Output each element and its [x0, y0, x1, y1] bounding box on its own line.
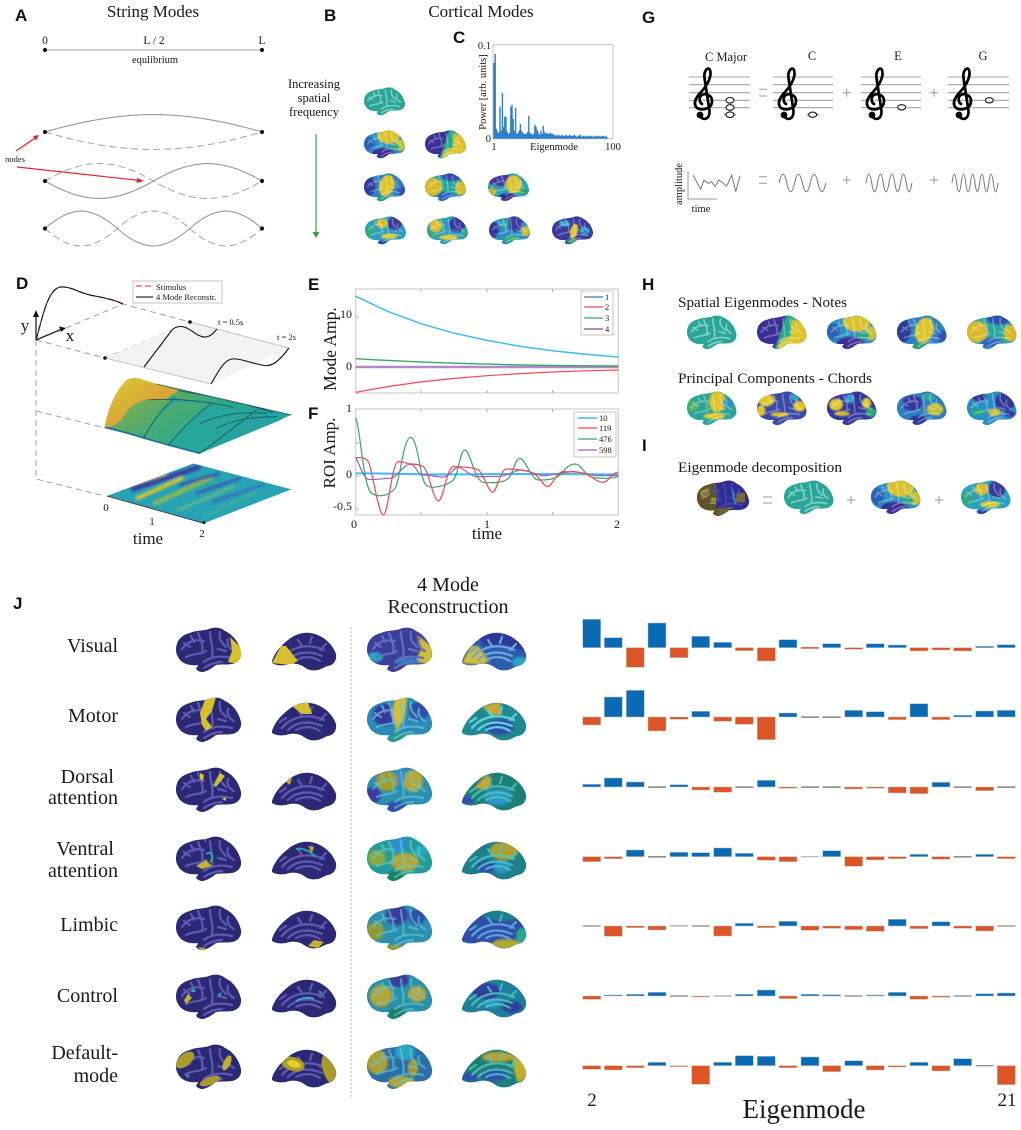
bar chart: default mode [583, 1056, 1015, 1085]
equilibrium string [42, 35, 266, 66]
equals sign [763, 497, 772, 503]
heading: 4 Mode Reconstruction [387, 574, 509, 618]
3D surface [105, 378, 292, 453]
spectrum labels: 1 [491, 142, 497, 153]
mode 2 curves [43, 164, 264, 198]
row: control brains [176, 973, 528, 1020]
3D axes: x [66, 326, 75, 345]
spectrum labels: Eigenmode [530, 142, 578, 153]
bar chart: ventral attention [583, 848, 1015, 866]
composite waveform [693, 175, 740, 192]
spectrum axes [493, 45, 613, 139]
axis labels: time [472, 524, 502, 543]
mode brain 1 [784, 480, 834, 515]
legend: 10 [599, 413, 608, 423]
decomposition brain [697, 480, 750, 517]
equilibrium string: 0 [42, 35, 48, 47]
legend: 476 [599, 434, 612, 444]
note labels: G [978, 49, 988, 63]
note labels [705, 49, 988, 64]
eigenmode axis labels [587, 1090, 1016, 1124]
legend: 119 [599, 423, 611, 433]
mode brain 2 [870, 477, 921, 515]
heading: 4 Mode Reconstruction: Reconstruction [387, 596, 509, 618]
time axis labels: 0 [103, 502, 109, 514]
mode 3 curves [43, 211, 264, 246]
legend: 2 [605, 302, 609, 312]
heading: Cortical Modes: Cortical Modes [428, 2, 534, 21]
axes box [356, 409, 618, 515]
panel letter I: I [642, 436, 647, 455]
row: motor brains [176, 697, 528, 743]
legend: Stimulus [156, 282, 186, 292]
increasing spatial frequency label [288, 77, 341, 119]
increasing spatial frequency label: frequency [289, 105, 340, 119]
equilibrium string: L / 2 [143, 35, 165, 47]
3D axes [21, 310, 75, 345]
panel E: mode amplitude chart [308, 275, 618, 393]
notes [724, 98, 993, 117]
panel B: cortical modes [288, 2, 594, 246]
panel letter E: E [308, 275, 319, 294]
equilibrium string: L [258, 35, 266, 47]
heading: Eigenmode decomposition: Eigenmode decomposition [678, 460, 843, 476]
spectrum labels [478, 41, 621, 153]
axis labels: 1 [346, 401, 352, 415]
legend [581, 291, 613, 335]
sine waves [779, 174, 998, 192]
heading: Spatial Eigenmodes - Notes: Spatial Eigenmodes - Notes [678, 295, 847, 311]
network labels: attention [48, 787, 118, 809]
network labels: Ventral [56, 838, 114, 860]
legend: 3 [605, 313, 609, 323]
panel letter D: D [16, 274, 28, 293]
panel letter F: F [308, 404, 318, 423]
mode brain 3 [961, 480, 1011, 516]
arrow: green downward [312, 134, 320, 238]
spectrum labels: Power [arb. units] [478, 54, 489, 130]
time axis labels [103, 502, 205, 548]
bar chart: limbic [583, 919, 1015, 936]
panel C: power spectrum [453, 28, 621, 153]
y axis labels: 0 [346, 359, 352, 373]
bar chart: dorsal attention [583, 778, 1015, 794]
equals and plus signs for waves [759, 176, 938, 184]
increasing spatial frequency label: Increasing [288, 77, 341, 91]
ROI curves [356, 418, 618, 515]
bar chart: visual [583, 619, 1015, 667]
mode 1 curves [43, 115, 264, 149]
axis labels: ROI Amp. [320, 418, 339, 488]
mode curves [356, 296, 618, 392]
plus sign [847, 496, 855, 504]
heading: String Modes: String Modes [107, 2, 199, 21]
increasing spatial frequency label: spatial [298, 91, 331, 105]
network labels: Motor [68, 705, 118, 727]
heading: 4 Mode Reconstruction: 4 Mode [417, 574, 479, 596]
axis labels: 2 [614, 517, 620, 531]
row: visual brains [176, 627, 528, 673]
spectrum bars [494, 54, 607, 139]
bar chart: control [583, 990, 1015, 999]
axis labels: 0 [346, 467, 352, 481]
time series axes: time [692, 204, 711, 215]
network labels: Control [57, 985, 118, 1007]
row: dorsal attention brains [176, 767, 528, 813]
panel letter B: B [324, 6, 336, 25]
note labels: E [894, 49, 902, 63]
row: ventral attention brains [176, 836, 528, 882]
panel letter H: H [642, 275, 654, 294]
musical staves [689, 77, 1009, 108]
brain row: chords [687, 391, 1017, 426]
legend [133, 281, 222, 303]
panel letter C: C [453, 28, 465, 47]
time series axes: amplitude [674, 163, 685, 205]
panel J: resting state networks [13, 574, 1016, 1124]
panel D: stimulus surface [16, 274, 296, 548]
eigenmode axis labels: 2 [587, 1090, 597, 1111]
time axis labels: 2 [199, 528, 205, 540]
nodes annotation with red arrows [5, 135, 144, 183]
equals and plus signs for staves [759, 89, 938, 97]
legend: 4 [605, 324, 610, 334]
time axis labels: 1 [149, 516, 155, 528]
legend: 4 Mode Reconstr. [156, 292, 216, 302]
heading: Principal Components - Chords: Principal Components - Chords [678, 371, 872, 387]
panel G: music analogy [642, 8, 1009, 215]
divider [350, 627, 352, 1099]
panel I: eigenmode decomposition [642, 436, 1011, 517]
panel A: string modes [5, 2, 266, 246]
spectrum labels: 0.1 [478, 41, 491, 52]
spectrum labels: 100 [605, 142, 621, 153]
heat map [107, 463, 292, 524]
time slices plane: t = 2s [277, 332, 296, 342]
treble clefs [695, 69, 971, 119]
time slices plane [103, 317, 296, 384]
network labels: Default- [51, 1042, 118, 1064]
network labels: attention [48, 860, 118, 882]
y axis labels: Mode Amp. [320, 307, 340, 391]
guide dashed lines [36, 304, 190, 496]
note labels: C Major [705, 50, 748, 64]
time slices plane: t = 0.5s [218, 317, 243, 327]
network labels: Limbic [60, 914, 118, 936]
panel letter A: A [15, 6, 27, 25]
network labels: Dorsal [61, 766, 114, 788]
row: default mode brains [173, 1044, 528, 1090]
plus sign [935, 496, 943, 504]
legend [574, 412, 616, 457]
legend: 598 [599, 445, 612, 455]
note labels: C [808, 49, 816, 63]
spectrum labels: 0 [486, 134, 491, 145]
network labels [48, 635, 118, 1087]
nodes annotation with red arrows: nodes [5, 154, 25, 164]
time series axes [674, 163, 717, 215]
panel letter G: G [642, 8, 655, 27]
y axis labels: 10 [340, 307, 352, 321]
eigenmode axis labels: 21 [998, 1090, 1016, 1111]
stimulus curve at origin [36, 287, 123, 340]
network labels: Visual [67, 635, 118, 657]
panel letter J: J [13, 594, 22, 613]
y axis labels [320, 307, 352, 391]
brain row: notes [687, 311, 1017, 351]
brain grid of cortical modes [363, 87, 594, 246]
time axis labels: time [133, 529, 163, 548]
3D axes: y [21, 316, 30, 335]
row: limbic brains [176, 905, 528, 953]
axis labels: -0.5 [333, 499, 352, 513]
axis labels [320, 401, 620, 543]
axis labels: 0 [351, 517, 357, 531]
panel F: ROI amplitude chart [308, 401, 620, 543]
equilibrium string: equlibrium [132, 55, 178, 66]
axes box [356, 289, 618, 393]
bar chart: motor [583, 690, 1015, 740]
network labels: mode [74, 1065, 118, 1087]
axis labels: 1 [484, 517, 490, 531]
legend: 1 [605, 292, 609, 302]
eigenmode axis labels: Eigenmode [743, 1094, 865, 1124]
panel H: notes and chords [642, 275, 1017, 426]
